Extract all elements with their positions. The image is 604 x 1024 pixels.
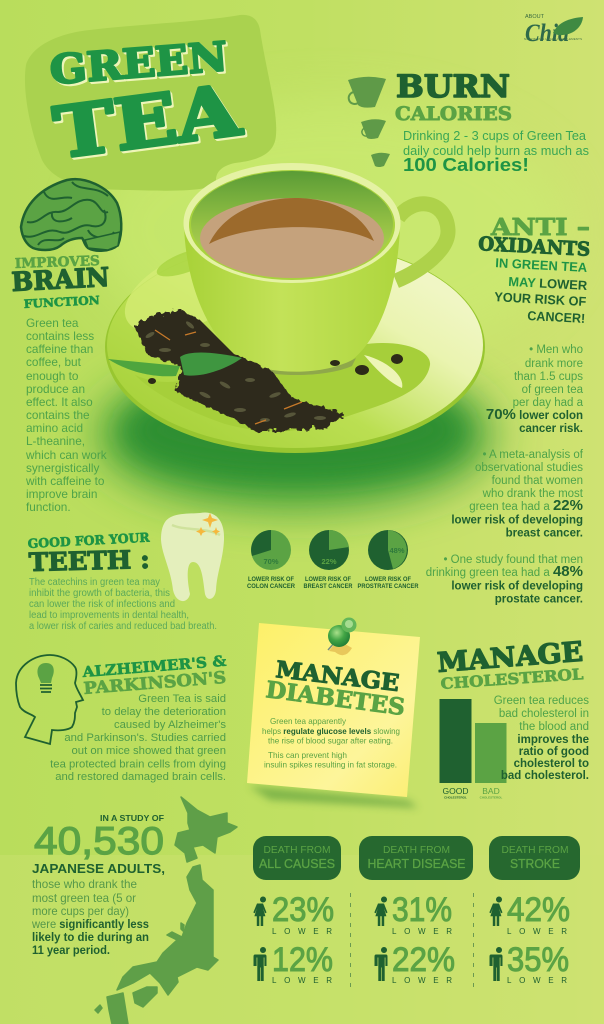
text: alzheimer's xyxy=(50,693,226,783)
icon: tooth xyxy=(161,512,224,601)
text: breast cancer: green tea had a 22% xyxy=(469,497,583,514)
text: breast cancer: lower risk of developing xyxy=(451,514,583,526)
text: alzheimer's: Green Tea is said xyxy=(138,693,226,705)
text: breast cancer: who drank the most xyxy=(482,488,584,500)
text: brain: effect. It also xyxy=(26,395,93,409)
text: cholesterol xyxy=(494,695,589,782)
text: cholesterol: ratio of good xyxy=(519,746,589,758)
pie chart: colon cancer: COLON CANCER xyxy=(247,584,296,590)
icon: brain xyxy=(21,179,121,251)
pin xyxy=(328,618,356,655)
text: prostate cancer: drinking green tea had a 48% xyxy=(426,563,583,580)
column: death from all causes: LOWER xyxy=(272,976,332,985)
heading: Improves Brain Function: BRAIN xyxy=(11,263,110,298)
text: cholesterol: improves the xyxy=(517,734,589,746)
text: teeth: a lower risk of caries and reduced bad breath. xyxy=(29,621,217,632)
subheading: lower your risk: MAY LOWER xyxy=(508,274,588,293)
pie chart: breast cancer: LOWER RISK OF xyxy=(305,577,351,583)
heading: Manage Cholesterol: MANAGE xyxy=(436,637,584,679)
logo: About Chia: ABOUT xyxy=(525,14,545,20)
text: Japanese study: 40,530 xyxy=(34,820,164,863)
sticky note: manage diabetes: DIABETES xyxy=(264,676,407,721)
heading: Alzheimer's and Parkinson's: ALZHEIMER'S & xyxy=(81,653,227,681)
text: alzheimer's: caused by Alzheimer's xyxy=(114,719,226,731)
column: death from stroke: STROKE xyxy=(510,856,560,871)
text: colon cancer xyxy=(486,344,584,435)
sticky note: manage diabetes: insulin spikes resulting in fat storage. xyxy=(264,760,397,770)
heading: Improves Brain Function: FUNCTION xyxy=(23,293,101,311)
heading: Manage Cholesterol: CHOLESTEROL xyxy=(440,665,584,693)
column: death from stroke xyxy=(489,836,580,985)
sticky note: manage diabetes: Green tea apparently xyxy=(270,716,347,726)
text: Japanese study: likely to die during an xyxy=(32,930,149,944)
text: brain: contains the xyxy=(26,408,90,422)
column: death from heart disease: 31% xyxy=(392,891,452,929)
text: teeth: inhibit the growth of bacteria, this xyxy=(29,588,170,599)
column: death from all causes: ALL CAUSES xyxy=(259,856,335,871)
text: teeth xyxy=(29,577,217,632)
sticky note: manage diabetes: helps regulate glucose levels slowing xyxy=(262,726,400,736)
text: cholesterol: bad cholesterol. xyxy=(501,770,589,782)
pie chart: prostate cancer: LOWER RISK OF xyxy=(365,577,411,583)
column: death from all causes: 12% xyxy=(272,941,333,979)
text: breast cancer xyxy=(451,449,584,540)
text: alzheimer's: tea protected brain cells from dying xyxy=(50,758,226,770)
sticky note: manage diabetes: MANAGE xyxy=(274,656,401,697)
text: breast cancer: found that women xyxy=(492,475,583,487)
sticky note: manage diabetes: the rise of blood sugar after eating. xyxy=(268,736,393,746)
text: Japanese study: 11 year period. xyxy=(32,943,110,957)
column: death from all causes: LOWER xyxy=(272,927,332,936)
column: death from stroke: 42% xyxy=(507,891,570,929)
bar chart: cholesterol: BAD xyxy=(482,786,500,796)
text: brain xyxy=(25,316,107,514)
text: Japanese study: were significantly less xyxy=(31,917,149,931)
column: death from heart disease xyxy=(359,836,473,985)
subheading: lower your risk xyxy=(494,255,588,326)
column: death from stroke: DEATH FROM xyxy=(502,845,568,856)
text: burn calories: daily could help burn as much as xyxy=(403,143,589,158)
bar chart: cholesterol: GOOD xyxy=(443,786,468,796)
text: Japanese study: more cups per day) xyxy=(32,904,129,918)
text: brain: enough to xyxy=(26,369,79,383)
heading: Alzheimer's and Parkinson's xyxy=(81,653,227,698)
map: Japan xyxy=(95,797,237,1024)
text: Japanese study: IN A STUDY OF xyxy=(100,813,164,823)
text: Japanese study: JAPANESE ADULTS, xyxy=(32,861,165,876)
column: death from heart disease: LOWER xyxy=(392,927,452,936)
heading: Improves Brain Function xyxy=(11,253,110,311)
logo: About Chia: Chia xyxy=(525,20,569,47)
pie chart: prostate cancer: PROSTRATE CANCER xyxy=(358,584,419,590)
text: prostate cancer: prostate cancer. xyxy=(495,594,583,606)
bar chart: cholesterol: CHOLESTEROL xyxy=(480,796,502,800)
text: Japanese study xyxy=(31,813,165,957)
text: alzheimer's: out on mice showed that green xyxy=(72,745,226,757)
column: death from heart disease: 22% xyxy=(392,941,455,979)
heading: Anti-oxidants: OXIDANTS xyxy=(478,233,591,261)
text: alzheimer's: and restored damaged brain cells. xyxy=(55,771,226,783)
text: colon cancer: • Men who xyxy=(529,344,583,356)
sticky note: manage diabetes xyxy=(247,618,420,808)
text: colon cancer: cancer risk. xyxy=(519,423,583,435)
text: alzheimer's: to delay the deterioration xyxy=(102,706,226,718)
text: colon cancer: 70% lower colon xyxy=(486,406,583,423)
heading: Good for your teeth: GOOD FOR YOUR xyxy=(27,530,151,551)
heading: Anti-oxidants: ANTI – xyxy=(490,214,590,241)
bar chart: cholesterol xyxy=(440,699,506,800)
text: cholesterol: Green tea reduces xyxy=(494,695,589,707)
text: breast cancer: • A meta-analysis of xyxy=(482,449,584,461)
heading: Burn Calories: BURN xyxy=(396,69,510,105)
text: teeth: The catechins in green tea may xyxy=(29,577,160,588)
subheading: lower your risk: CANCER! xyxy=(527,308,586,326)
text: burn calories: 100 Calories! xyxy=(403,154,529,175)
text: cholesterol: the blood and xyxy=(519,721,589,733)
heading: Alzheimer's and Parkinson's: PARKINSON'S xyxy=(83,668,227,698)
text: brain: coffee, but xyxy=(26,355,82,369)
text: prostate cancer: lower risk of developing xyxy=(451,580,583,592)
text: breast cancer: observational studies xyxy=(475,462,583,474)
logo: About Chia xyxy=(524,14,583,47)
text: colon cancer: per day had a xyxy=(513,397,584,409)
text: breast cancer: breast cancer. xyxy=(506,528,583,540)
column: death from heart disease: LOWER xyxy=(392,976,452,985)
heading: Anti-oxidants xyxy=(478,214,591,261)
text: colon cancer: of green tea xyxy=(522,384,584,396)
title: Green Tea: GREEN xyxy=(48,33,229,94)
pie chart: colon cancer xyxy=(247,530,296,590)
icon: head with light bulb xyxy=(16,655,83,744)
tea leaves xyxy=(108,310,403,432)
text: burn calories: Drinking 2 - 3 cups of Green Tea xyxy=(403,128,587,143)
pie chart: colon cancer: LOWER RISK OF xyxy=(248,577,294,583)
text: brain: Green tea xyxy=(26,316,79,330)
title blob xyxy=(25,15,276,191)
title: Green Tea xyxy=(48,33,247,175)
text: brain: amino acid xyxy=(26,421,83,435)
pie chart: breast cancer xyxy=(304,530,353,590)
column: death from all causes xyxy=(253,836,341,985)
heading: Good for your teeth: TEETH : xyxy=(28,545,150,577)
saucer xyxy=(105,229,485,453)
column: death from heart disease: HEART DISEASE xyxy=(368,856,466,871)
text: brain: which can work xyxy=(25,448,107,462)
pie chart: breast cancer: BREAST CANCER xyxy=(304,584,353,590)
text: brain: synergistically xyxy=(26,461,100,475)
column: death from all causes: DEATH FROM xyxy=(264,845,330,856)
text: brain: improve brain xyxy=(26,487,97,501)
text: brain: contains less xyxy=(26,329,94,343)
pie chart: prostate cancer: 48% xyxy=(389,546,405,555)
text: cholesterol: cholesterol to xyxy=(514,758,589,770)
text: brain: caffeine than xyxy=(26,342,93,356)
column: death from stroke: LOWER xyxy=(507,976,567,985)
logo: About Chia: NUTRITION & HEALTH SUPPLEMENTS xyxy=(524,37,582,41)
text: colon cancer: drank more xyxy=(525,358,583,370)
icons: shrinking cups xyxy=(348,77,390,167)
text: teeth: can lower the risk of infections and xyxy=(29,599,175,610)
sticky note: manage diabetes: This can prevent high xyxy=(268,750,347,760)
text: burn calories xyxy=(403,128,589,175)
text: cholesterol: bad cholesterol in xyxy=(499,708,589,720)
column: death from stroke: LOWER xyxy=(507,927,567,936)
text: Japanese study: those who drank the xyxy=(32,877,137,891)
title: Green Tea: TEA xyxy=(49,68,247,175)
teacup xyxy=(184,163,448,375)
text: teeth: lead to improvements in dental health, xyxy=(29,610,189,621)
pie chart: colon cancer: 70% xyxy=(263,557,279,566)
text: prostate cancer: • One study found that men xyxy=(443,554,583,566)
subheading: lower your risk: YOUR RISK OF xyxy=(494,289,587,309)
column: death from heart disease: DEATH FROM xyxy=(383,845,450,856)
text: brain: function. xyxy=(26,500,71,514)
text: brain: with caffeine to xyxy=(25,474,105,488)
heading: Improves Brain Function: IMPROVES xyxy=(15,253,100,272)
heading: Good for your teeth xyxy=(27,530,151,577)
text: colon cancer: than 1.5 cups xyxy=(514,371,583,383)
text: alzheimer's: and Parkinson's. Studies carried xyxy=(64,732,226,744)
pie chart: prostate cancer xyxy=(358,530,419,590)
text: brain: L-theanine, xyxy=(26,434,85,448)
column: death from stroke: 35% xyxy=(507,941,569,979)
text: Japanese study: most green tea (5 or xyxy=(32,891,136,905)
pie chart: breast cancer: 22% xyxy=(321,557,337,566)
text: prostate cancer xyxy=(426,554,583,606)
bar chart: cholesterol: CHOLESTEROL xyxy=(444,796,467,800)
subheading: lower your risk: IN GREEN TEA xyxy=(495,255,588,275)
column: death from all causes: 23% xyxy=(272,891,334,929)
heading: Burn Calories xyxy=(395,69,512,125)
text: brain: produce an xyxy=(26,382,85,396)
heading: Burn Calories: CALORIES xyxy=(395,103,512,125)
